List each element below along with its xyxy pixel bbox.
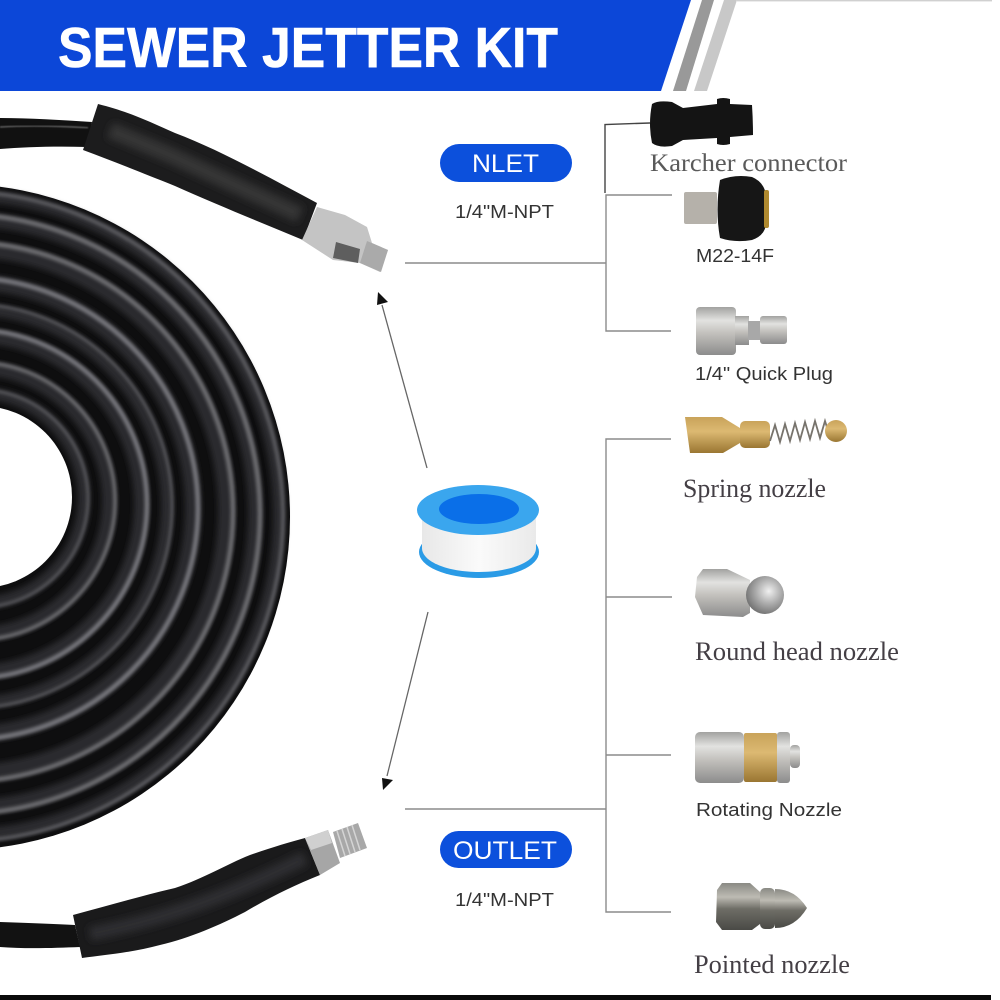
- label: pointed nozzle: Pointed nozzle: [694, 950, 850, 979]
- fitting: quarter inch quick plug: [696, 307, 787, 355]
- top hose end with inlet fitting: [0, 104, 388, 272]
- arrow: up to inlet: [377, 292, 427, 468]
- outlet pill: [440, 831, 572, 868]
- label: quick plug: 1/4" Quick Plug: [695, 364, 833, 384]
- connector lines: [405, 123, 672, 912]
- label: spring nozzle: Spring nozzle: [683, 474, 826, 503]
- fitting: rotating nozzle: [695, 732, 800, 783]
- label: rotating nozzle: Rotating Nozzle: [696, 800, 842, 820]
- fitting: pointed nozzle: [716, 883, 807, 930]
- fitting: spring nozzle: [685, 417, 847, 453]
- label: M22-14F: M22-14F: [696, 246, 774, 266]
- fitting: round head nozzle: [695, 569, 784, 617]
- label: round head nozzle: Round head nozzle: [695, 637, 899, 666]
- bottom border bar: [0, 995, 991, 1000]
- header banner: [0, 0, 992, 91]
- label: Karcher connector: Karcher connector: [650, 150, 848, 177]
- inlet pill: NLET: [472, 150, 539, 178]
- title: SEWER JETTER KIT: [58, 16, 558, 80]
- arrow: down to outlet: [382, 612, 428, 790]
- fitting: Karcher connector: [650, 98, 753, 147]
- fitting: M22-14F: [684, 176, 769, 241]
- coiled black hose: [0, 184, 290, 850]
- outlet pill: OUTLET: [453, 837, 557, 865]
- inlet pill: [440, 144, 572, 182]
- PTFE tape roll: [417, 485, 539, 578]
- outlet spec: 1/4"M-NPT: [455, 890, 554, 910]
- bottom hose end with outlet fitting: [0, 823, 367, 958]
- inlet spec: 1/4"M-NPT: [455, 202, 554, 222]
